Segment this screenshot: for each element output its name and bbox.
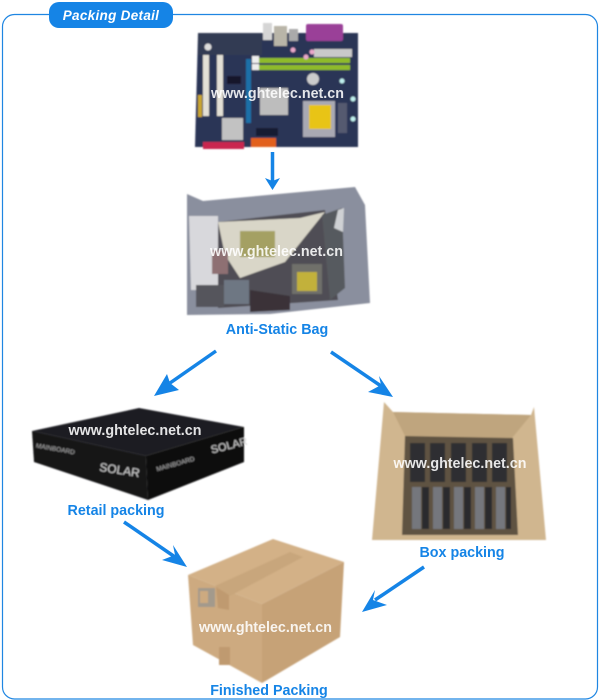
label: Finished Packing: Finished Packing — [210, 683, 328, 699]
arrow: retail to finished — [124, 522, 187, 567]
arrow: box to finished — [362, 567, 424, 612]
watermark: www.ghtelec.net.cn — [68, 423, 201, 439]
header pill: Packing Detail: Packing Detail — [63, 8, 159, 23]
watermark: www.ghtelec.net.cn — [198, 620, 332, 636]
finished carton photo — [188, 539, 344, 683]
header pill: Packing Detail — [49, 2, 173, 28]
watermark: www.ghtelec.net.cn — [393, 456, 526, 472]
retail box photo — [32, 408, 249, 500]
label: Retail packing: Retail packing — [68, 503, 164, 519]
arrow: motherboard to bag — [265, 152, 280, 190]
label: Anti-Static Bag: Anti-Static Bag — [226, 322, 328, 338]
arrow: bag to retail — [154, 351, 216, 396]
motherboard photo — [195, 23, 358, 149]
carton with boards photo — [372, 402, 546, 540]
retail box photo: MAINBOARD — [35, 443, 76, 456]
retail box photo: SOLAR — [98, 460, 141, 480]
watermark: www.ghtelec.net.cn — [209, 244, 343, 260]
retail box photo: MAINBOARD — [156, 456, 196, 473]
retail box photo: SOLAR — [210, 436, 249, 456]
arrow: bag to box — [331, 352, 393, 397]
anti-static bag photo — [187, 187, 370, 315]
watermark: www.ghtelec.net.cn — [210, 86, 344, 102]
label: Box packing: Box packing — [419, 545, 505, 561]
